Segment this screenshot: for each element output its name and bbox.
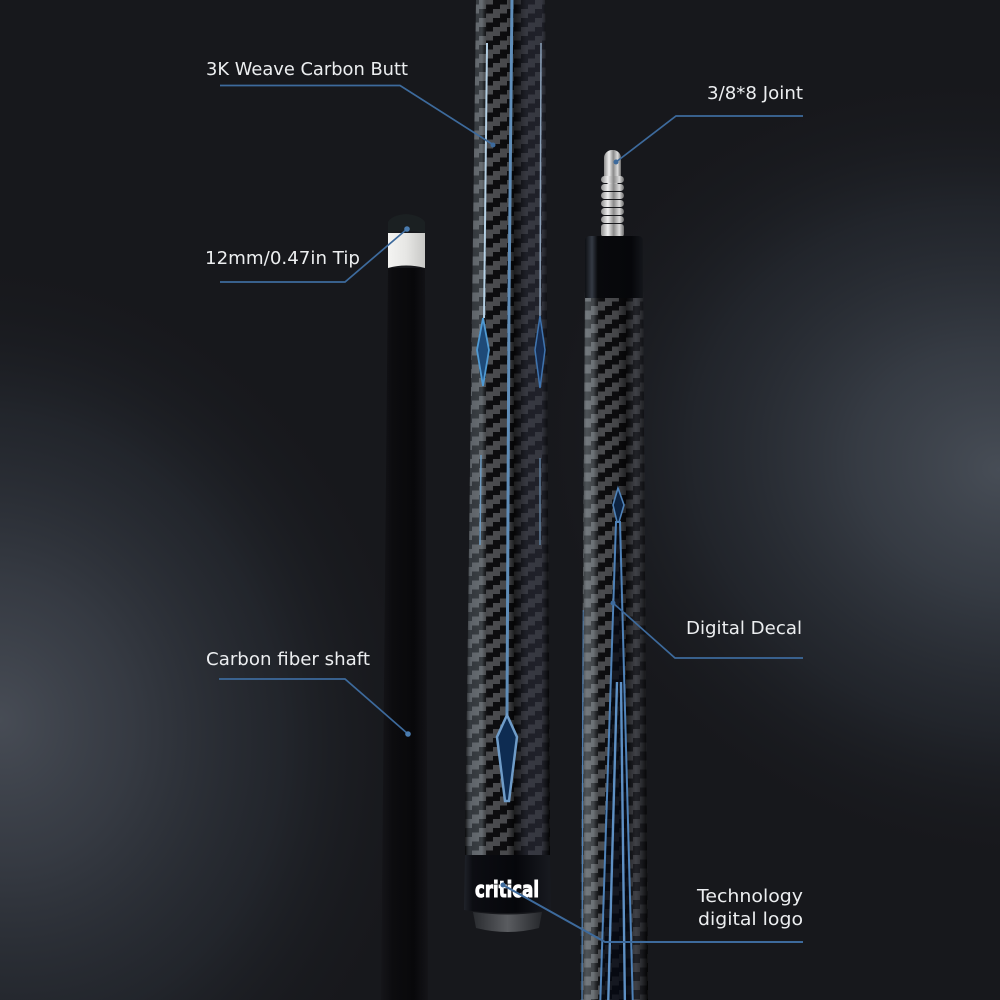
leather tip (388, 214, 425, 233)
callout: carbon fiber shaft (206, 649, 411, 737)
callout: technology digital logo: Technology (696, 886, 803, 907)
callout: 12mm tip: 12mm/0.47in Tip (205, 248, 360, 269)
callout: technology digital logo (500, 882, 803, 942)
callout: carbon fiber shaft: Carbon fiber shaft (206, 649, 370, 670)
carbon weave body (580, 290, 648, 1000)
shaft body (381, 268, 428, 1000)
callout: 3K Weave Carbon Butt (206, 59, 496, 148)
logo: critical (475, 878, 539, 903)
cue shaft (left) (381, 214, 428, 1000)
white ferrule (388, 233, 425, 268)
callout: technology digital logo: digital logo (698, 909, 803, 930)
decal spear (582, 488, 633, 1000)
joint section (right) (580, 150, 648, 1000)
callout: digital decal: Digital Decal (686, 618, 802, 639)
callout: 3K Weave Carbon Butt: 3K Weave Carbon Butt (206, 59, 408, 80)
callout: joint: 3/8*8 Joint (707, 83, 803, 104)
cue butt (centre) (464, 0, 551, 932)
black butt ring (464, 855, 551, 913)
decal lines and diamonds (477, 0, 545, 801)
callout: joint (614, 83, 803, 164)
threaded pin (601, 150, 624, 237)
black collar (585, 236, 643, 298)
callout: 12mm tip (205, 226, 410, 282)
rubber bumper (473, 912, 542, 932)
body shading (465, 0, 550, 860)
callout: digital decal (610, 600, 803, 658)
body shading (580, 290, 648, 1000)
carbon weave body (465, 0, 550, 860)
